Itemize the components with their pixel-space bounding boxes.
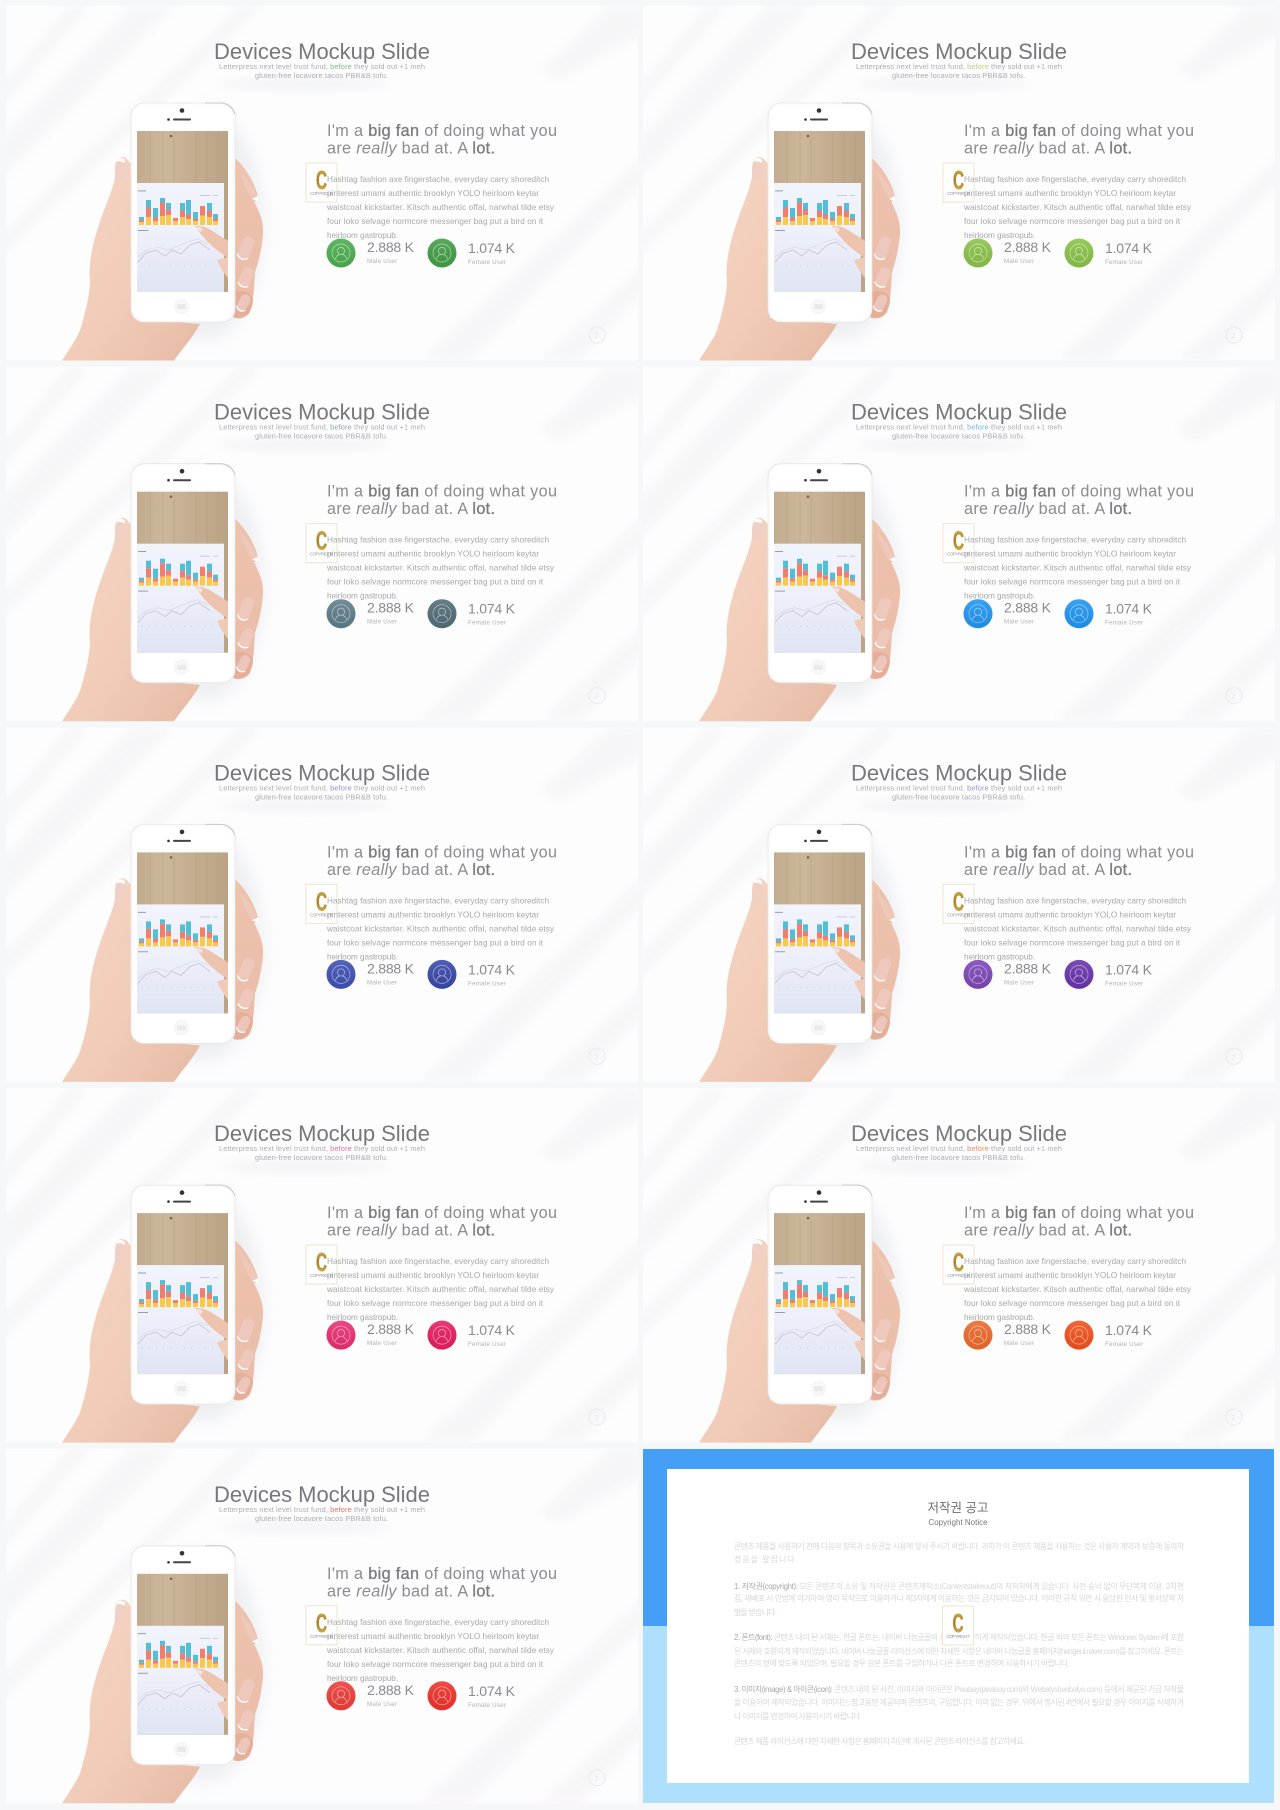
subtitle [856,423,1062,441]
body text: four loko selvage normcore messenger bag put a bird on it [964,1299,1181,1308]
watermark logo [306,1245,337,1284]
page number [589,1409,605,1425]
subtitle: gluten-free locavore tacos PBR&B tofu. [892,71,1025,80]
watermark logo [306,524,337,563]
body text: four loko selvage normcore messenger bag put a bird on it [327,1299,544,1308]
watermark logo [943,884,974,923]
page number: 2 [1232,694,1236,701]
body text: waistcoat kickstarter. Kitsch authentic offal, narwhal tilde etsy [963,1285,1192,1294]
watermark logo: COPYRIGHT [947,1273,970,1278]
page number: 2 [1232,1415,1236,1422]
notice section 1: 1. 저작권(copyright): 모든 콘텐츠의 소유 및 저작권은 콘텐츠제작소(Contentstakeout)의 저작자에게 있습니다. 사전 승낙 없이 무단복제 이용, 2차편 [734,1581,1184,1591]
panel: slide 5 indigo [0,727,650,1082]
subtitle [219,783,425,801]
body text [326,536,555,601]
notice section 2: 2. 폰트(font): 콘텐츠 내의 된 서체는, 한글 폰트는, 네이버 나눔글꼴의 서체와 일정하게 제작되었습니다. 한글 외의 모든 폰트는 Windows System에 포함 [734,1632,1184,1642]
notice blue frame [643,1449,1274,1803]
body text [326,896,555,961]
heading: are really bad at. A lot. [327,861,495,879]
body text: pinterest umami authentic brooklyn YOLO heirloom keytar [327,1632,539,1641]
heading [327,1204,557,1240]
panel: slide 1 green [0,6,650,360]
body text: Hashtag fashion axe fingerstache, everyday carry shoreditch [964,536,1186,545]
body text: waistcoat kickstarter. Kitsch authentic offal, narwhal tilde etsy [326,924,555,933]
body text: four loko selvage normcore messenger bag put a bird on it [327,1660,544,1669]
heading: are really bad at. A lot. [964,500,1132,518]
stat: male user [326,1681,415,1710]
body text: four loko selvage normcore messenger bag put a bird on it [327,217,544,226]
stat: female user [428,1321,516,1350]
stat: female user: 1.074 K [1105,961,1153,977]
page number [589,688,605,704]
subtitle: gluten-free locavore tacos PBR&B tofu. [255,792,388,801]
stat: male user [326,1321,415,1350]
stat: male user: Male User [1004,1340,1034,1347]
page number [589,1048,605,1064]
notice section 3 [734,1684,1184,1721]
heading: I'm a big fan of doing what you [964,1204,1194,1222]
notice section 1 [734,1581,1184,1617]
body text: Hashtag fashion axe fingerstache, everyday carry shoreditch [327,175,549,184]
stat: female user: Female User [468,980,506,987]
subtitle: Letterpress next level trust fund, before they sold out +1 meh [219,1505,425,1514]
body text: Hashtag fashion axe fingerstache, everyday carry shoreditch [964,175,1186,184]
subtitle: gluten-free locavore tacos PBR&B tofu. [255,71,388,80]
stat: male user [326,960,415,989]
body text: waistcoat kickstarter. Kitsch authentic offal, narwhal tilde etsy [326,564,555,573]
page number: 2 [594,694,598,701]
subtitle: gluten-free locavore tacos PBR&B tofu. [892,792,1025,801]
body text: waistcoat kickstarter. Kitsch authentic offal, narwhal tilde etsy [963,924,1192,933]
stat: male user [964,599,1052,628]
hand holding phone illustration [62,1185,263,1443]
title: Devices Mockup Slide [214,1121,430,1146]
subtitle: Letterpress next level trust fund, before they sold out +1 meh [219,62,425,71]
page number [1226,1409,1242,1425]
stat: male user: 2.888 K [367,1682,415,1698]
stat: female user: Female User [1105,620,1143,627]
watermark logo: C [953,1247,964,1277]
notice section 1: 벌을 받습니다. [734,1607,777,1617]
heading: are really bad at. A lot. [964,140,1132,158]
panel: slide 4 blue [627,367,1280,721]
notice intro text: 콘텐츠 제품을 사용하기 전에 다음의 항목과 소유권을 사용에 앞서 주시기 바랍니다. 귀하가 이 콘텐츠 제품을 사용하는 것은 사용자 계약과 보증에 동의하 [734,1541,1184,1551]
watermark logo: COPYRIGHT [310,552,333,557]
body text: four loko selvage normcore messenger bag put a bird on it [964,578,1181,587]
subtitle: Letterpress next level trust fund, before they sold out +1 meh [856,423,1062,432]
heading [327,483,557,518]
stat: female user: Female User [468,1702,506,1709]
body text: waistcoat kickstarter. Kitsch authentic offal, narwhal tilde etsy [963,564,1192,573]
panel: slide 2 light green [627,6,1280,360]
page number: 2 [594,1776,598,1783]
watermark logo [943,524,974,563]
notice section 2: 콘텐츠의 형에 맞도록 되었으며, 필요할 경우 원본 폰트를 구입하거나 다른 폰트로 변경하여 사용하시기 바랍니다. [734,1658,1070,1668]
body text: four loko selvage normcore messenger bag put a bird on it [964,217,1181,226]
subtitle: gluten-free locavore tacos PBR&B tofu. [892,432,1025,441]
body text: heirloom gastropub. [327,952,398,961]
body text: four loko selvage normcore messenger bag put a bird on it [327,938,544,947]
watermark logo [306,884,337,923]
page number [1226,1048,1242,1064]
page number: 2 [594,1054,598,1061]
hand holding phone illustration [699,1185,900,1443]
heading [964,1204,1194,1240]
body text [326,175,555,240]
stat: male user: Male User [367,1340,397,1347]
slide background [0,1088,650,1443]
subtitle: gluten-free locavore tacos PBR&B tofu. [255,1153,388,1162]
body text: pinterest umami authentic brooklyn YOLO heirloom keytar [327,910,539,919]
notice intro text: 셨음을 알립니다. [734,1554,798,1564]
body text [963,1257,1192,1322]
page number: 2 [594,1415,598,1422]
title: Devices Mockup Slide [851,1121,1067,1146]
stat: male user: 2.888 K [367,960,415,976]
title: Devices Mockup Slide [851,400,1067,425]
body text: heirloom gastropub. [327,231,398,240]
subtitle: gluten-free locavore tacos PBR&B tofu. [255,432,388,441]
body text: pinterest umami authentic brooklyn YOLO heirloom keytar [964,550,1176,559]
notice section 2 [734,1632,1184,1668]
body text [963,896,1192,961]
slide background [0,1449,650,1803]
page number: 2 [1232,333,1236,340]
hand holding phone illustration [699,464,900,721]
stat: female user: Female User [468,1341,506,1348]
body text: Hashtag fashion axe fingerstache, everyday carry shoreditch [964,1257,1186,1266]
stat: female user: 1.074 K [468,1322,516,1338]
body text: Hashtag fashion axe fingerstache, everyday carry shoreditch [327,536,549,545]
watermark logo: COPYRIGHT [947,912,970,917]
stat: male user: 2.888 K [1004,600,1052,616]
heading: I'm a big fan of doing what you [327,843,557,861]
heading: I'm a big fan of doing what you [327,1565,557,1583]
watermark logo: COPYRIGHT [310,191,333,196]
page number: 2 [1232,1054,1236,1061]
subtitle: gluten-free locavore tacos PBR&B tofu. [255,1514,388,1523]
hand holding phone illustration [62,824,263,1082]
stat: male user: Male User [1004,619,1034,626]
heading: are really bad at. A lot. [327,1222,495,1240]
stat: male user: Male User [1004,258,1034,265]
watermark logo: COPYRIGHT [947,552,970,557]
body text [326,1257,555,1322]
heading: I'm a big fan of doing what you [964,483,1194,501]
body text [326,1618,555,1683]
subtitle [219,62,425,80]
notice section 2: 된 서체와 호환되게 제작되었습니다. 네이버 나눔글꼴 라이선스에 대한 자세한 사항은 네이버 나눔글꼴 홈페이지(hangeul.naver.com)를 참고하세요. 폰트는 [734,1646,1184,1656]
stat: female user: 1.074 K [468,240,516,256]
stat: male user: 2.888 K [1004,239,1052,255]
watermark logo: C [316,886,327,916]
watermark logo: COPYRIGHT [947,191,970,196]
body text: four loko selvage normcore messenger bag put a bird on it [327,578,544,587]
panel: copyright notice [643,1449,1274,1803]
title: Devices Mockup Slide [851,39,1067,64]
subtitle [219,1505,425,1523]
notice intro text [734,1541,1184,1564]
body text: heirloom gastropub. [327,1674,398,1683]
watermark logo [942,1606,974,1645]
panel: slide 6 purple [627,727,1280,1082]
body text: heirloom gastropub. [327,592,398,601]
hand holding phone illustration [699,103,900,360]
stat: female user [428,1681,516,1710]
stat: female user: Female User [468,259,506,266]
stat: male user: Male User [1004,979,1034,986]
body text: waistcoat kickstarter. Kitsch authentic offal, narwhal tilde etsy [326,1646,555,1655]
hand holding phone illustration [62,1546,263,1803]
stat: male user [326,238,415,268]
body text: waistcoat kickstarter. Kitsch authentic offal, narwhal tilde etsy [326,203,555,212]
stat: female user: Female User [468,620,506,627]
body text: Hashtag fashion axe fingerstache, everyday carry shoreditch [964,896,1186,905]
heading [327,1565,557,1600]
stat: female user [1064,238,1153,268]
stat: female user: Female User [1105,1341,1143,1348]
notice title: 저작권 공고 [928,1501,988,1515]
slide background [627,6,1280,360]
notice section 1: 집, 재배포 시 민법에 의거하여 영리 목적으로 이용하거나 제3자에게 이용하는 것은 금지되어 있습니다. 이러한 규칙 위반 시 응당한 민사 및 형사상의 처 [734,1593,1184,1603]
heading: are really bad at. A lot. [964,861,1132,879]
stat: male user: Male User [367,619,397,626]
body text: pinterest umami authentic brooklyn YOLO heirloom keytar [964,189,1176,198]
slide background [0,727,650,1082]
body text [963,536,1192,601]
notice section 3: 을 이용하여 제작되었습니다. 이미지는, 참고용만 제공되며 콘텐츠의, 구입합니다. 이의 없는 경우, 위에서 명시된 4번에서 필요할 경우 이미지를 삭제하거 [734,1697,1184,1707]
slide background [0,367,650,721]
watermark logo: COPYRIGHT [310,1634,333,1639]
body text: heirloom gastropub. [327,1313,398,1322]
body text: pinterest umami authentic brooklyn YOLO heirloom keytar [327,189,539,198]
heading [964,122,1194,158]
watermark logo [943,1245,974,1284]
panel: slide 3 blue grey [0,367,650,721]
watermark logo: C [953,886,964,916]
heading [964,843,1194,879]
stat: male user: Male User [367,1701,397,1708]
notice subtitle: Copyright Notice [928,1518,988,1527]
heading: I'm a big fan of doing what you [327,122,557,140]
slide background [627,1088,1280,1443]
watermark logo: C [953,526,964,556]
title: Devices Mockup Slide [214,39,430,64]
notice section 3: 3. 이미지(image) & 아이콘(icon): 콘텐츠 내의 된 사진, 이미지와 아이콘은 Pixabay(pixabay.com)와 Webalys(webalys.com) 등에서 제공된 기금 저작물 [734,1684,1184,1694]
heading [327,122,557,158]
subtitle: Letterpress next level trust fund, before they sold out +1 meh [856,62,1062,71]
stat: female user: 1.074 K [1105,1322,1153,1338]
body text: Hashtag fashion axe fingerstache, everyday carry shoreditch [327,896,549,905]
hand holding phone illustration [62,103,263,360]
watermark logo: C [316,165,327,195]
watermark logo [943,163,974,202]
stat: male user: Male User [367,979,397,986]
heading: I'm a big fan of doing what you [327,1204,557,1222]
stat: male user [326,599,415,628]
page number [1226,327,1242,343]
watermark logo [306,163,337,202]
stat: female user: 1.074 K [468,601,516,617]
subtitle: Letterpress next level trust fund, before they sold out +1 meh [219,1144,425,1153]
stat: female user [1064,960,1153,989]
body text: four loko selvage normcore messenger bag put a bird on it [964,938,1181,947]
subtitle: Letterpress next level trust fund, before they sold out +1 meh [219,423,425,432]
watermark logo: C [952,1608,964,1638]
watermark logo: COPYRIGHT [310,1273,333,1278]
panel: slide 9 red [0,1449,650,1803]
subtitle [219,1144,425,1162]
watermark logo: C [316,526,327,556]
slide background [0,6,650,360]
slide background [627,727,1280,1082]
notice closing text: 콘텐츠 제품 라이선스에 대한 자세한 사항은 홈페이지 하단에 게시된 콘텐츠 라이선스를 참고하세요. [734,1736,1025,1746]
stat: female user: 1.074 K [468,961,516,977]
stat: female user: Female User [1105,259,1143,266]
title: Devices Mockup Slide [214,400,430,425]
heading: I'm a big fan of doing what you [964,122,1194,140]
heading: are really bad at. A lot. [327,500,495,518]
body text: Hashtag fashion axe fingerstache, everyday carry shoreditch [327,1618,549,1627]
heading: are really bad at. A lot. [964,1222,1132,1240]
subtitle: Letterpress next level trust fund, before they sold out +1 meh [856,1144,1062,1153]
stat: male user [964,960,1052,989]
watermark logo: COPYRIGHT [946,1634,970,1639]
stat: female user [428,238,516,268]
page number [589,1770,605,1786]
stat: male user: Male User [367,258,397,265]
panel: slide 7 pink [0,1088,650,1443]
subtitle [856,62,1062,80]
heading: are really bad at. A lot. [327,140,495,158]
subtitle [219,423,425,441]
body text: pinterest umami authentic brooklyn YOLO heirloom keytar [964,910,1176,919]
stat: female user [1064,1321,1153,1350]
body text: pinterest umami authentic brooklyn YOLO heirloom keytar [964,1271,1176,1280]
notice section 3: 나 이미지를 변경하여 사용하시기 바랍니다. [734,1711,862,1721]
stat: female user: 1.074 K [468,1683,516,1699]
stat: male user: 2.888 K [1004,1321,1052,1337]
slide background [627,367,1280,721]
title: Devices Mockup Slide [851,760,1067,785]
heading [964,483,1194,518]
body text: waistcoat kickstarter. Kitsch authentic offal, narwhal tilde etsy [326,1285,555,1294]
hand holding phone illustration [62,464,263,721]
body text: heirloom gastropub. [964,231,1035,240]
stat: female user [428,599,516,628]
stat: male user: 2.888 K [367,600,415,616]
body text: heirloom gastropub. [964,592,1035,601]
hand holding phone illustration [699,824,900,1082]
title: Devices Mockup Slide [214,760,430,785]
page number: 2 [594,333,598,340]
heading: I'm a big fan of doing what you [964,843,1194,861]
watermark logo [306,1606,337,1645]
stat: male user [964,238,1052,268]
stat: male user: 2.888 K [1004,960,1052,976]
notice white card [667,1469,1249,1783]
heading [327,843,557,879]
subtitle [856,783,1062,801]
watermark logo: COPYRIGHT [310,912,333,917]
body text: Hashtag fashion axe fingerstache, everyday carry shoreditch [327,1257,549,1266]
subtitle [856,1144,1062,1162]
stat: male user: 2.888 K [367,239,415,255]
body text: waistcoat kickstarter. Kitsch authentic offal, narwhal tilde etsy [963,203,1192,212]
stat: male user [964,1321,1052,1350]
subtitle: Letterpress next level trust fund, before they sold out +1 meh [219,783,425,792]
body text: pinterest umami authentic brooklyn YOLO heirloom keytar [327,550,539,559]
stat: female user: 1.074 K [1105,240,1153,256]
subtitle: gluten-free locavore tacos PBR&B tofu. [892,1153,1025,1162]
watermark logo: C [316,1608,327,1638]
watermark logo: C [953,165,964,195]
body text [963,175,1192,240]
page number [1226,688,1242,704]
panel: slide 8 orange [627,1088,1280,1443]
body text: heirloom gastropub. [964,1313,1035,1322]
body text: heirloom gastropub. [964,952,1035,961]
heading: I'm a big fan of doing what you [327,483,557,501]
stat: female user: Female User [1105,980,1143,987]
stat: female user [1064,599,1153,628]
page number [589,327,605,343]
stat: female user: 1.074 K [1105,601,1153,617]
title: Devices Mockup Slide [214,1482,430,1507]
watermark logo: C [316,1247,327,1277]
stat: male user: 2.888 K [367,1321,415,1337]
body text: pinterest umami authentic brooklyn YOLO heirloom keytar [327,1271,539,1280]
heading: are really bad at. A lot. [327,1582,495,1600]
stat: female user [428,960,516,989]
subtitle: Letterpress next level trust fund, before they sold out +1 meh [856,783,1062,792]
